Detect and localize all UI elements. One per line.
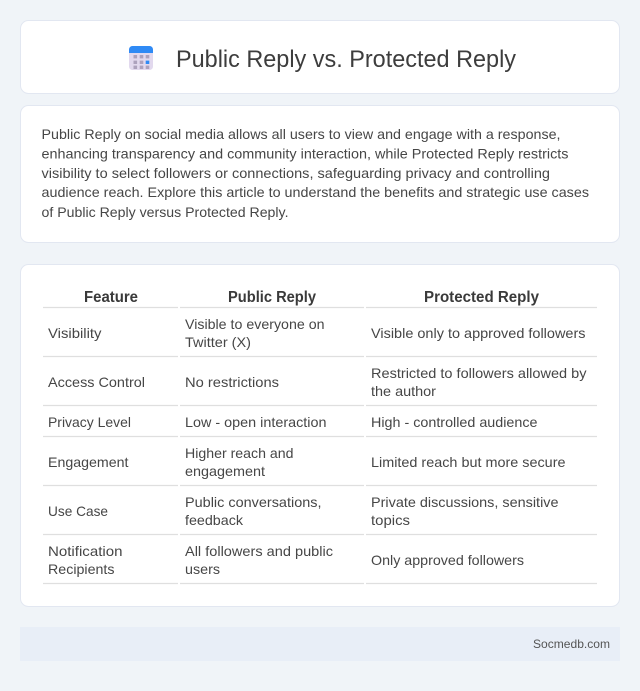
table header: Public Reply [228, 289, 316, 306]
panel: comparison table card [20, 264, 620, 606]
table row: privacy level: Low - open interaction [185, 414, 326, 430]
table row: notification recipients: Recipients [48, 561, 114, 577]
table header: Protected Reply [424, 289, 539, 306]
table row: engagement: Higher reach and [185, 445, 294, 461]
text block: description: of Public Reply versus Protected Reply. [42, 204, 288, 220]
table row: access control: the author [371, 383, 436, 399]
table header: Feature [84, 289, 138, 306]
table row: engagement: Engagement [48, 454, 129, 470]
text block: description: audience reach. Explore this article to understand the benefits and strategic use cases [42, 184, 589, 200]
table row: use case: topics [371, 512, 410, 528]
table row: use case: Public conversations, [185, 494, 322, 510]
table row: engagement: Limited reach but more secure [371, 454, 566, 470]
panel: description card [20, 106, 620, 242]
icon: calendar [129, 46, 153, 70]
table row: visibility: Visible only to approved followers [371, 325, 586, 341]
table row: privacy level [48, 414, 538, 430]
table row: visibility [48, 316, 586, 350]
table header [84, 289, 539, 306]
table row: use case: Use Case [48, 503, 108, 519]
table row: engagement: engagement [185, 463, 265, 479]
footer bar [20, 627, 620, 661]
text block: description: visibility to select followers or connections, safeguarding privacy and controlling [42, 165, 550, 181]
table row: visibility: Twitter (X) [185, 334, 251, 350]
text block: description: Public Reply on social media allows all users to view and engage with a response, [42, 126, 560, 142]
table row: access control [48, 365, 586, 399]
table row: visibility: Visible to everyone on [185, 316, 324, 332]
table row: privacy level: High - controlled audience [371, 414, 538, 430]
table row: access control: Restricted to followers allowed by [371, 365, 586, 381]
table row: engagement [48, 445, 566, 479]
table row: use case: feedback [185, 512, 244, 528]
table row: access control: No restrictions [185, 374, 279, 390]
title: Public Reply vs. Protected Reply [176, 46, 516, 73]
table row: access control: Access Control [48, 374, 145, 390]
table row: notification recipients: Notification [48, 543, 122, 559]
table row: notification recipients: Only approved followers [371, 552, 524, 568]
footer credit: Socmedb.com [533, 637, 610, 651]
table row: notification recipients: All followers and public [185, 543, 333, 559]
text block: description [42, 126, 589, 220]
text block: description: enhancing transparency and community interaction, while Protected Reply restricts [42, 146, 568, 162]
table row: use case: Private discussions, sensitive [371, 494, 559, 510]
table row: privacy level: Privacy Level [48, 414, 131, 430]
table row: visibility: Visibility [48, 325, 102, 341]
panel: title card [20, 20, 620, 94]
table row: notification recipients: users [185, 561, 220, 577]
table row: notification recipients [48, 543, 524, 577]
table row: use case [48, 494, 559, 528]
